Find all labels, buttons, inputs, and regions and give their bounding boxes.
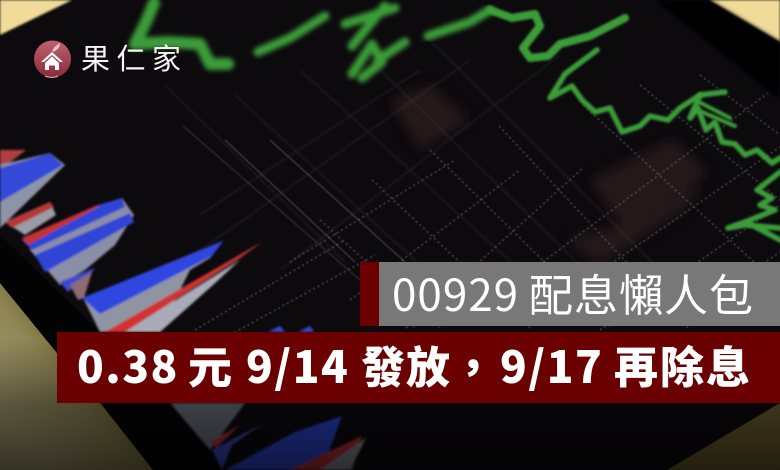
left volume chart peaks bbox=[0, 150, 314, 332]
headline text: 發放， bbox=[361, 332, 496, 396]
headline text: 0.38 bbox=[77, 332, 190, 396]
green price line bbox=[135, 3, 780, 240]
headline bar bbox=[57, 332, 780, 403]
subtitle text: 00929 bbox=[392, 260, 530, 324]
headline text: 9/14 bbox=[246, 332, 361, 396]
lower chart peaks bbox=[170, 403, 366, 470]
bright dashed grid lines bbox=[195, 75, 780, 335]
long solid reflective lines bbox=[183, 126, 415, 328]
headline text: 元 bbox=[188, 332, 242, 396]
subtitle bar: red accent block bbox=[360, 262, 379, 326]
far grid lines bbox=[130, 40, 680, 300]
headline text: 9/17 bbox=[500, 332, 615, 396]
subtitle text: 配息懶人包 bbox=[529, 260, 754, 324]
icon: red circle with house bbox=[34, 40, 71, 78]
logo wordmark: 果仁家 bbox=[81, 36, 188, 78]
reddish screen cells bbox=[390, 85, 708, 265]
subtitle bar: gray panel bbox=[379, 262, 780, 326]
headline text: 再除息 bbox=[614, 332, 752, 396]
logo: 果仁家 bbox=[34, 36, 188, 78]
